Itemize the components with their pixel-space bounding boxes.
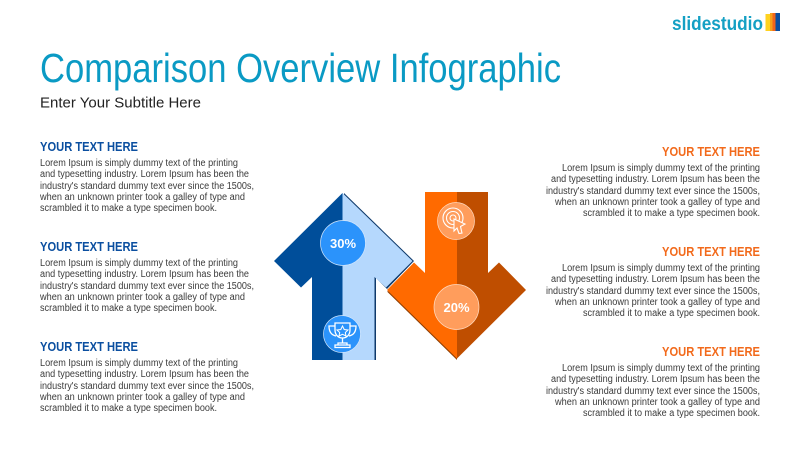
right text block 1: Lorem Ipsum is simply dummy text of the printing [562, 163, 760, 174]
left text block 2: YOUR TEXT HERE [40, 239, 138, 254]
badge: 20%: 20% [443, 300, 470, 315]
left text block 3: YOUR TEXT HERE [40, 339, 138, 354]
left text block 2: Lorem Ipsum is simply dummy text of the printing [40, 258, 238, 269]
right text block 2: when an unknown printer took a galley of type and [554, 297, 760, 308]
right text block 1: scrambled it to make a type specimen book. [583, 208, 760, 219]
right text block 1: industry's standard dummy text ever since the 1500s, [546, 186, 760, 197]
right text block 3: when an unknown printer took a galley of type and [554, 397, 760, 408]
right text block 1: and typesetting industry. Lorem Ipsum has been the [551, 174, 760, 185]
up arrow [274, 193, 414, 360]
badge: 20% [434, 284, 479, 330]
left text block 1: industry's standard dummy text ever since the 1500s, [40, 181, 254, 192]
left text block 1: scrambled it to make a type specimen book. [40, 203, 217, 214]
logo: slidestudio: slidestudio [672, 14, 763, 35]
left text block 3: industry's standard dummy text ever since the 1500s, [40, 381, 254, 392]
badge: 30% [320, 220, 366, 266]
right text block 2: YOUR TEXT HERE [662, 244, 760, 259]
right text block 1: YOUR TEXT HERE [662, 144, 760, 159]
icon: target cursor [438, 202, 474, 240]
title: Comparison Overview Infographic [40, 45, 561, 91]
right text block 3: YOUR TEXT HERE [662, 344, 760, 359]
left text block 2: when an unknown printer took a galley of type and [39, 292, 245, 303]
right text block 3: and typesetting industry. Lorem Ipsum has been the [551, 374, 760, 385]
left text block 3: and typesetting industry. Lorem Ipsum has been the [40, 369, 249, 380]
left text block 3 [39, 339, 254, 414]
badge: 30%: 30% [330, 236, 356, 251]
right text block 2 [546, 244, 760, 319]
right text block 3: Lorem Ipsum is simply dummy text of the printing [562, 363, 760, 374]
left text block 1: Lorem Ipsum is simply dummy text of the printing [40, 158, 238, 169]
right text block 2: Lorem Ipsum is simply dummy text of the printing [562, 263, 760, 274]
left text block 2 [39, 239, 254, 314]
right text block 1: when an unknown printer took a galley of type and [554, 197, 760, 208]
right text block 2: and typesetting industry. Lorem Ipsum has been the [551, 274, 760, 285]
left text block 1 [39, 139, 254, 214]
left text block 2: scrambled it to make a type specimen book. [40, 303, 217, 314]
left text block 2: and typesetting industry. Lorem Ipsum has been the [40, 269, 249, 280]
left text block 1: and typesetting industry. Lorem Ipsum has been the [40, 169, 249, 180]
down arrow [387, 192, 526, 360]
right text block 3 [546, 344, 760, 419]
right text block 3: scrambled it to make a type specimen book. [583, 408, 760, 419]
left text block 2: industry's standard dummy text ever since the 1500s, [40, 281, 254, 292]
left text block 3: scrambled it to make a type specimen book. [40, 403, 217, 414]
right text block 2: scrambled it to make a type specimen book. [583, 308, 760, 319]
left text block 3: Lorem Ipsum is simply dummy text of the printing [40, 358, 238, 369]
right text block 2: industry's standard dummy text ever since the 1500s, [546, 286, 760, 297]
right text block 1 [546, 144, 760, 219]
left text block 3: when an unknown printer took a galley of type and [39, 392, 245, 403]
subtitle: Enter Your Subtitle Here [40, 94, 201, 112]
left text block 1: YOUR TEXT HERE [40, 139, 138, 154]
right text block 3: industry's standard dummy text ever since the 1500s, [546, 386, 760, 397]
icon: trophy [324, 316, 360, 352]
left text block 1: when an unknown printer took a galley of type and [39, 192, 245, 203]
